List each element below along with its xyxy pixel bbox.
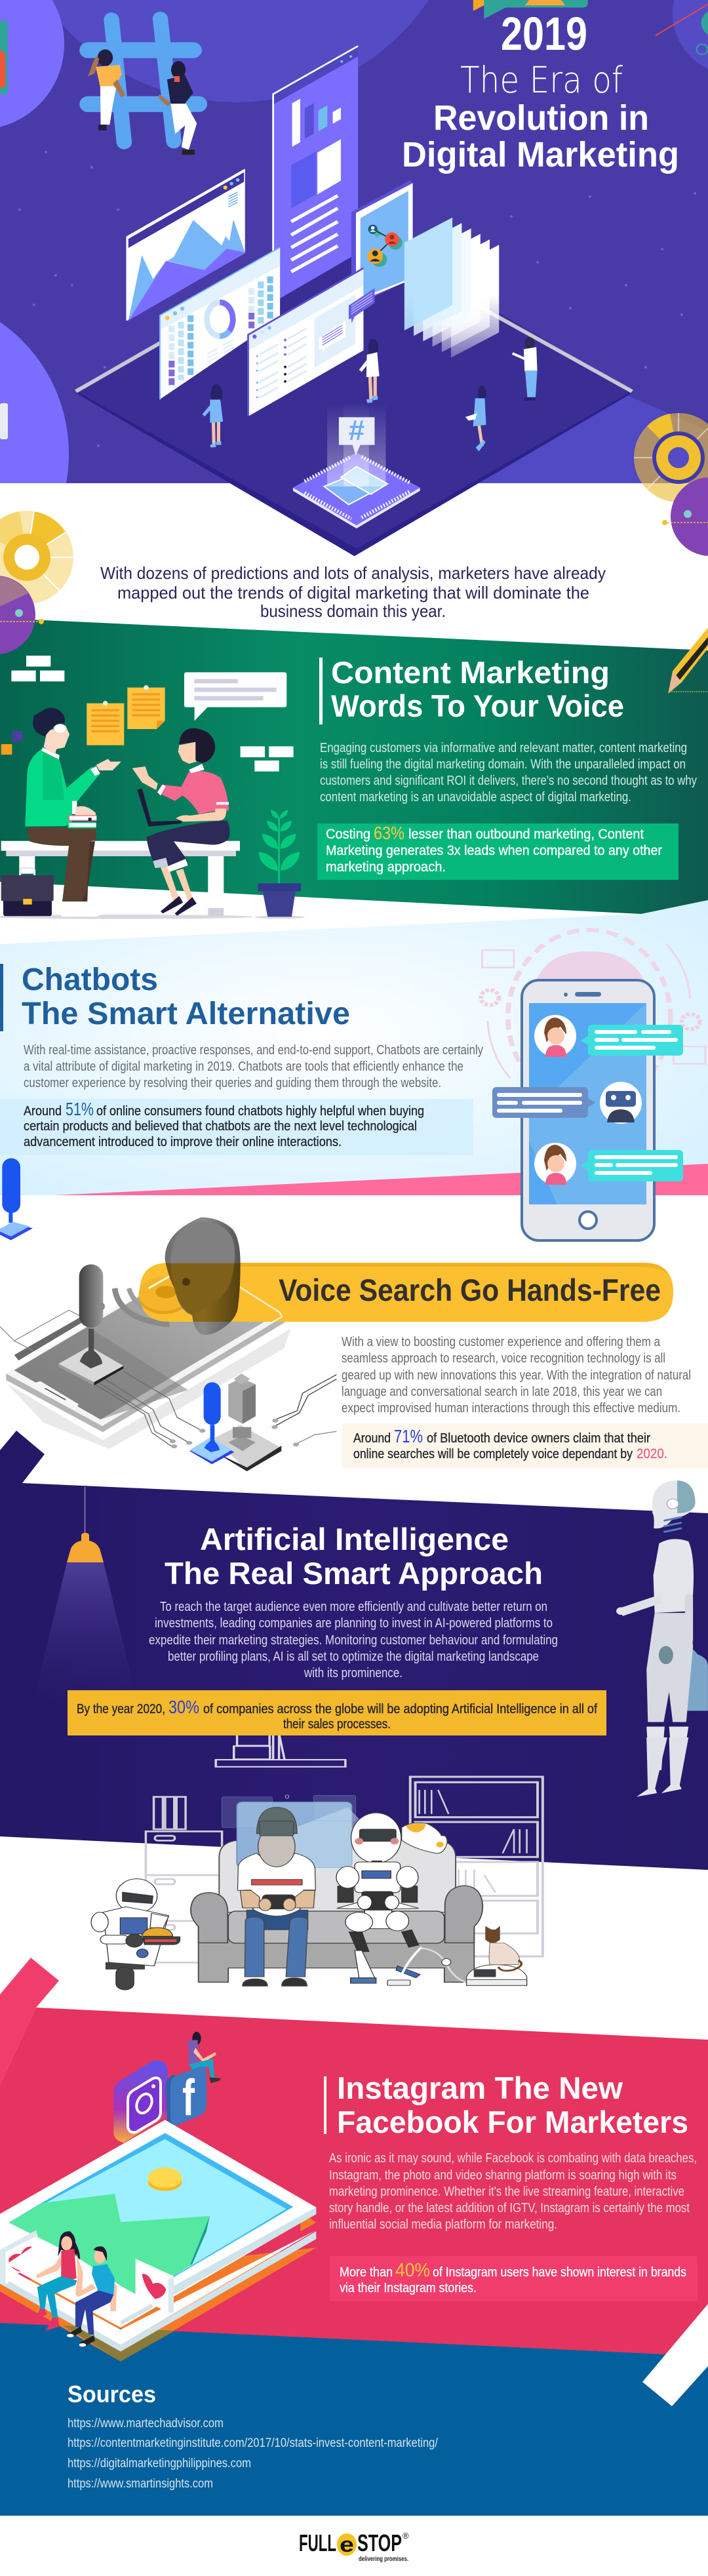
head xyxy=(165,1218,241,1335)
title: 2019 xyxy=(501,9,587,60)
callout: artificial intelligence stat: their sales processes. xyxy=(283,1717,391,1732)
callout: artificial intelligence stat: of companies across the globe will be adopting Artificial Intelligence in all of xyxy=(203,1702,597,1716)
area chart window xyxy=(127,170,245,321)
icon: facebook xyxy=(166,2066,206,2126)
callout: voice search stat: of Bluetooth device owners claim that their xyxy=(427,1431,650,1446)
panel: hero background xyxy=(0,0,708,483)
sound waves xyxy=(115,1288,169,1324)
decorative left gauge and purple circle xyxy=(0,511,73,654)
panel: tall web page xyxy=(273,46,358,302)
callout: voice search stat: online searches will be completely voice dependant by xyxy=(353,1447,633,1461)
heading: Artificial Intelligence: The Real Smart Approach xyxy=(165,1556,543,1591)
text: chatbots paragraph: a vital attribute of digital marketing in 2019. Chatbots are tools that efficiently enhance the xyxy=(24,1060,463,1074)
panel: instagram background xyxy=(0,1958,708,2356)
panel: sources background xyxy=(0,2323,708,2516)
microphone grey xyxy=(58,1264,123,1385)
callout: voice search stat: 2020. xyxy=(637,1446,667,1461)
person: man standing right xyxy=(513,337,538,401)
callout: content marketing stat: 63% xyxy=(374,823,404,843)
icon: top left envelope phone xyxy=(0,21,8,94)
text: voice search paragraph xyxy=(342,1335,691,1416)
text: content marketing paragraph: content marketing is an unavoidable aspect of digital marketing. xyxy=(320,790,631,804)
callout: instagram stat: More than xyxy=(340,2265,393,2280)
sofa xyxy=(191,1840,482,1982)
illustration: decorative icons behind phone xyxy=(481,930,705,1105)
sun xyxy=(148,2168,182,2191)
illustration: robot legs lower part xyxy=(637,1737,688,1796)
text: facebook f: f xyxy=(182,2069,195,2126)
icon: briefcase xyxy=(1,868,54,916)
bookcase xyxy=(410,1777,543,1956)
heading: Content Marketing: Content Marketing xyxy=(331,655,610,690)
heading: Voice Search Go Hands-Free: Voice Search Go Hands-Free xyxy=(279,1273,661,1307)
callout: artificial intelligence stat xyxy=(68,1690,606,1735)
callout: content marketing stat: Costing xyxy=(326,827,370,842)
person: woman left xyxy=(203,384,223,448)
text: artificial intelligence paragraph xyxy=(149,1600,558,1680)
text: sources list: https://www.martechadvisor.com xyxy=(68,2417,224,2430)
logo: Full e Stop: FULL xyxy=(299,2529,336,2556)
white photo frame xyxy=(0,2120,316,2328)
heading: Chatbots: The Smart Alternative xyxy=(22,997,350,1031)
heading: Sources: Sources xyxy=(68,2381,156,2408)
illustration: mannequin head over band xyxy=(139,1218,282,1335)
data table panel xyxy=(159,247,280,399)
text: chatbots paragraph xyxy=(24,1043,483,1090)
callout: instagram stat: via their Instagram stories. xyxy=(340,2281,477,2295)
callout: voice search stat xyxy=(342,1423,708,1469)
frame corner cards with hearts xyxy=(0,2230,174,2326)
title: Revolution in xyxy=(433,98,649,138)
text: artificial intelligence paragraph: with its prominence. xyxy=(304,1666,403,1680)
circuit lines xyxy=(0,1310,336,1446)
illustration: two people talking on a bench xyxy=(0,656,305,919)
icon: pencil xyxy=(668,627,708,694)
icon: sticky notes xyxy=(87,685,165,745)
person: woman in pink top xyxy=(132,728,229,916)
chat list panel xyxy=(248,268,374,416)
chat bubble two xyxy=(492,1087,595,1118)
siamese cat xyxy=(486,1926,521,1971)
sound rings on band xyxy=(139,1275,282,1322)
accent: white ribbon xyxy=(642,2304,708,2406)
person: man in green sweater xyxy=(25,708,121,917)
heading: Artificial Intelligence xyxy=(165,1522,543,1591)
hologram hashtag chip xyxy=(293,403,420,528)
icon: white bricks left xyxy=(11,656,64,681)
white lower plate xyxy=(0,2230,316,2352)
heading: Content Marketing xyxy=(319,655,624,724)
decorative right gauge and purple circle xyxy=(634,413,708,556)
logo: Full e Stop: delivering promises. xyxy=(359,2556,408,2563)
avatar: woman two xyxy=(534,1143,576,1185)
icon: blue microphone top left xyxy=(0,1159,33,1240)
illustration: standing robot xyxy=(616,1480,708,1770)
illustration: hashtag with two people xyxy=(88,19,199,155)
callout: instagram stat: 40% xyxy=(395,2260,430,2281)
person: woman with tablet xyxy=(465,386,486,452)
text: hashtag glyph: # xyxy=(349,414,364,446)
callout: content marketing stat: Marketing generates 3x leads when compared to any other xyxy=(326,843,662,858)
head band overlay xyxy=(165,1263,241,1322)
person: man on hashtag xyxy=(159,61,197,155)
illustration: living room with robots on a sofa xyxy=(91,1777,543,1990)
heading band: Voice Search xyxy=(140,1263,673,1322)
callout: content marketing stat: lesser than outbound marketing, Content xyxy=(408,827,644,842)
heading: Instagram: Instagram The New xyxy=(337,2071,623,2105)
text: sources list: https://contentmarketinginstitute.com/2017/10/stats-invest-content-marketing/ xyxy=(68,2436,439,2450)
cabinet with folders xyxy=(146,1797,222,1962)
phone shadow xyxy=(7,1329,290,1449)
text: sources list: https://www.smartinsights.com xyxy=(68,2477,213,2491)
heading: Instagram: Facebook For Marketers xyxy=(337,2105,688,2139)
callout: content marketing stat: marketing approach. xyxy=(326,860,446,875)
person: woman seated xyxy=(35,2231,83,2331)
heading: Artificial Intelligence: Artificial Intelligence xyxy=(200,1522,509,1556)
panel: artificial intelligence background xyxy=(0,1431,708,1870)
icon: speech bubble xyxy=(184,672,286,721)
text: sources list xyxy=(68,2417,439,2491)
callout: voice search stat: Around xyxy=(353,1431,391,1446)
icon: white bricks right xyxy=(241,746,294,772)
illustration: instagram photo frame with couple xyxy=(0,2032,316,2362)
bench xyxy=(1,841,240,916)
text: intro paragraph: mapped out the trends of digital marketing that will dominate the xyxy=(117,583,589,603)
text: intro paragraph: With dozens of predictions and lots of analysis, marketers have already xyxy=(100,563,606,583)
illustration: isometric platform base xyxy=(76,228,632,556)
heading: Chatbots xyxy=(0,962,350,1031)
logo: Full e Stop xyxy=(299,2529,409,2563)
person: woman centre xyxy=(359,339,380,403)
title: Digital Marketing xyxy=(402,135,679,174)
icon: top banner speech bubble xyxy=(473,0,588,19)
text: intro paragraph xyxy=(100,563,606,621)
illustration: ceiling lamp xyxy=(30,1487,141,1718)
vacuum cleaner robot xyxy=(387,1947,527,1985)
heading: Chatbots: Chatbots xyxy=(22,962,158,997)
text: intro paragraph: business domain this year. xyxy=(260,601,446,621)
text: artificial intelligence paragraph: investments, leading companies are planning to invest in AI-powered platforms to xyxy=(155,1616,553,1631)
icon: potted plant xyxy=(258,810,301,917)
wall shelf with boxes xyxy=(216,1730,345,1767)
text: artificial intelligence paragraph: expedite their marketing strategies. Monitoring customer behaviour and formulating xyxy=(149,1633,558,1648)
title xyxy=(402,9,679,174)
icon: instagram xyxy=(113,2061,168,2143)
tower and base xyxy=(214,1374,281,1471)
robot on sofa xyxy=(336,1813,420,1983)
callout: chatbots stat xyxy=(0,1099,473,1155)
text: voice search paragraph: With a view to boosting customer experience and offering them a xyxy=(342,1335,661,1349)
phone base xyxy=(6,1262,285,1432)
microphone blue xyxy=(189,1382,234,1464)
text: instagram paragraph xyxy=(329,2151,697,2232)
person: woman on hashtag xyxy=(88,49,125,130)
illustration: voice assistant on phone xyxy=(0,1159,336,1471)
callout: artificial intelligence stat: By the year 2020, xyxy=(77,1702,165,1716)
social network phone panel xyxy=(351,180,413,305)
callout: chatbots stat: 51% xyxy=(66,1099,94,1119)
icon: colored squares xyxy=(1,731,23,755)
logo: Full e Stop: ® xyxy=(403,2531,409,2541)
text: sources list: https://digitalmarketingphilippines.com xyxy=(68,2457,251,2470)
callout: instagram stat xyxy=(330,2256,698,2301)
title: The Era of xyxy=(460,59,623,101)
text: chatbots paragraph: With real-time assistance, proactive responses, and end-to-end support, Chatbots are certainly xyxy=(24,1043,483,1058)
person on icons xyxy=(188,2032,221,2083)
logo: Full e Stop: STOP xyxy=(357,2529,402,2556)
callout: chatbots stat: certain products and believed that chatbots are the next level technological xyxy=(24,1119,417,1134)
callout: content marketing stat xyxy=(317,823,678,880)
man with VR headset xyxy=(237,1808,315,1986)
text: artificial intelligence paragraph: To reach the target audience even more efficiently and cultivate better return on xyxy=(160,1600,547,1614)
callout: artificial intelligence stat: 30% xyxy=(168,1697,199,1717)
text: instagram paragraph: influential social media platform for marketing. xyxy=(329,2217,557,2232)
logo: Full e Stop: e xyxy=(340,2533,354,2556)
green hills xyxy=(9,2194,210,2297)
panel: content marketing background xyxy=(0,618,708,914)
stacked glass pages xyxy=(404,218,499,357)
icon: top right connector xyxy=(656,4,708,54)
icon: left card xyxy=(0,403,8,439)
text: chatbots paragraph: customer experience by resolving their queries and guiding them through the website. xyxy=(24,1076,441,1090)
heading: Content Marketing: Words To Your Voice xyxy=(331,688,624,723)
text: artificial intelligence paragraph: better profiling plans, AI is all set to optimize the digital marketing landscape xyxy=(168,1650,539,1664)
callout: chatbots stat: advancement introduced to improve their online interactions. xyxy=(24,1135,342,1149)
callout: chatbots stat: of online consumers found chatbots highly helpful when buying xyxy=(96,1104,424,1119)
chat bubble three xyxy=(581,1150,683,1181)
orange base layer xyxy=(0,2218,316,2362)
callout: voice search stat: 71% xyxy=(394,1426,423,1446)
small serving robot xyxy=(91,1879,180,1990)
VR screen hologram xyxy=(222,1795,376,1871)
avatar: woman one xyxy=(534,1015,576,1057)
illustration: smartphone with chatbot conversation xyxy=(492,980,683,1240)
chat bubble one xyxy=(581,1025,683,1056)
heading: Instagram xyxy=(324,2071,688,2139)
text: content marketing paragraph xyxy=(320,741,697,804)
callout: chatbots stat: Around xyxy=(24,1104,62,1119)
panel: chatbots background xyxy=(0,900,708,1195)
person: man seated xyxy=(67,2246,117,2347)
avatar: robot xyxy=(600,1082,642,1124)
phone body xyxy=(522,980,654,1240)
accent: pink wedge xyxy=(54,1164,708,1195)
illustration: isometric dashboard panels and people xyxy=(127,170,499,528)
cat on sofa back xyxy=(402,1823,447,1853)
